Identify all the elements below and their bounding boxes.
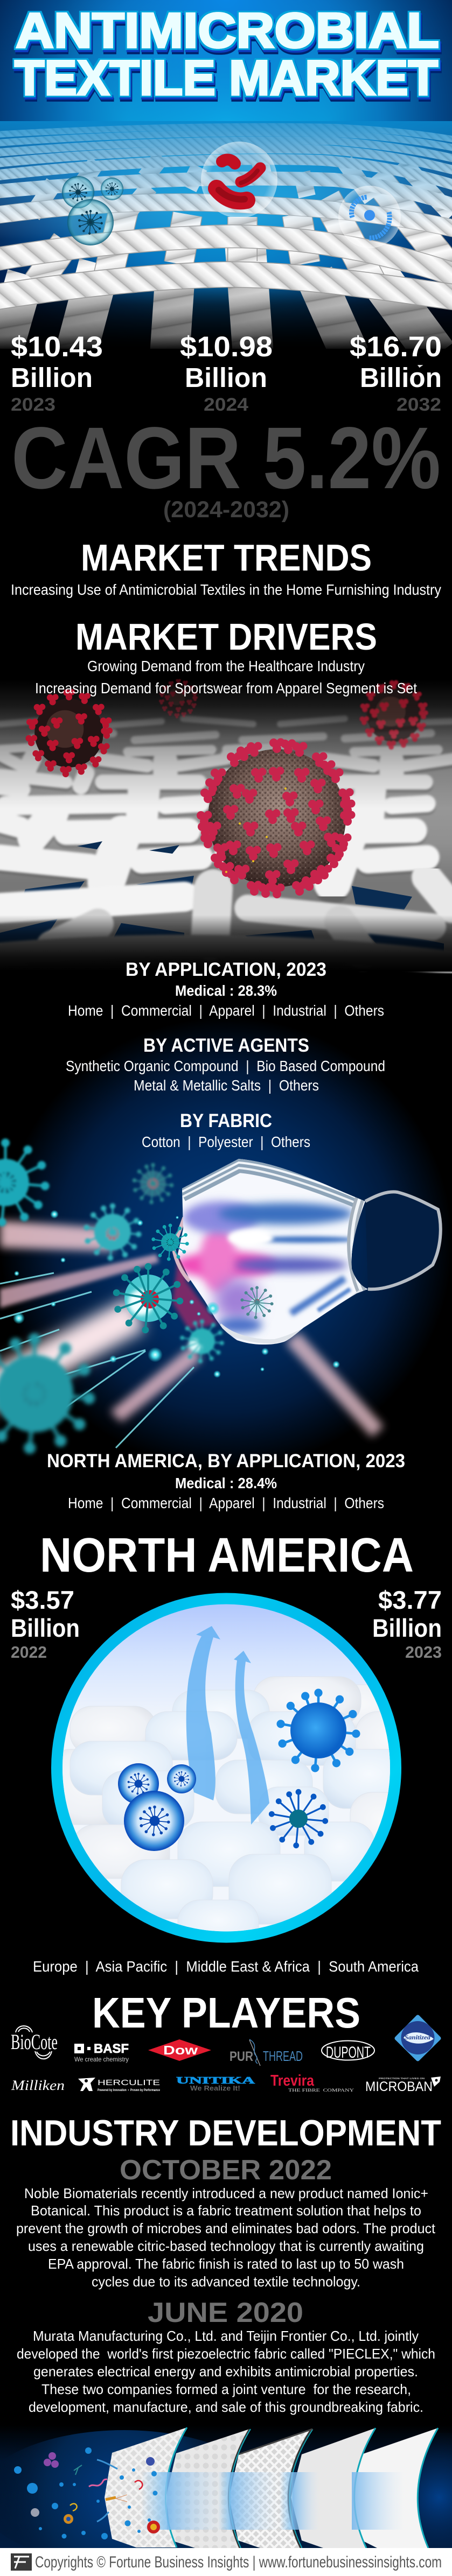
stat: north america 2022: 2022 bbox=[11, 1643, 47, 1662]
logo: unitika bbox=[176, 2075, 255, 2092]
logo: herculite bbox=[78, 2078, 160, 2092]
icon: mask ear loops bbox=[365, 1192, 441, 1289]
icon: rope net bbox=[0, 126, 452, 298]
icon: blue virus bbox=[278, 1690, 359, 1771]
logo: biocote bbox=[11, 2026, 58, 2059]
icon: quilted pillows bbox=[62, 1676, 390, 1931]
logo: trevira: Trevira bbox=[270, 2072, 315, 2089]
icon: motion beams bbox=[0, 1221, 384, 1448]
text: october development: Botanical. This product is a fabric treatment solution that helps to bbox=[31, 2202, 421, 2219]
section: by active agents bbox=[66, 1035, 385, 1094]
stat: 2032 market size: Billion bbox=[360, 362, 442, 393]
text: october development: cycles due to its advanced textile technology. bbox=[92, 2274, 360, 2290]
text: october development: uses a renewable citric-based technology that is currently awaiting bbox=[28, 2238, 424, 2254]
text: june development bbox=[17, 2328, 435, 2415]
stat: 2024 market size: $10.98 bbox=[180, 331, 273, 363]
icon: lower rope strands bbox=[4, 242, 436, 355]
text: june development: Murata Manufacturing Co., Ltd. and Teijin Frontier Co., Ltd. jointly bbox=[33, 2328, 419, 2344]
section: by active agents: BY ACTIVE AGENTS bbox=[143, 1035, 309, 1056]
logo: unitika: UNITIKA bbox=[176, 2075, 255, 2086]
panel: virus on fabric bbox=[0, 679, 452, 972]
logo: unitika: We Realize It! bbox=[190, 2084, 240, 2092]
icon: mask left straps bbox=[173, 1217, 190, 1281]
icon: teal microbe bbox=[270, 1790, 327, 1847]
icon: sharp cyan viruses bbox=[114, 1224, 273, 1363]
section: by application: BY APPLICATION, 2023 bbox=[126, 959, 326, 980]
icon: light band bbox=[141, 2472, 404, 2530]
icon: large virus bbox=[197, 738, 356, 898]
logo: basf bbox=[74, 2042, 129, 2063]
icon: layer one bbox=[105, 2427, 187, 2547]
section: north america by application: Medical : 28.4% bbox=[175, 1475, 277, 1491]
text: driver two: Increasing Demand for Sportswear from Apparel Segment is Set bbox=[35, 680, 417, 696]
text: june development: generates electrical energy and exhibits antimicrobial properties. bbox=[33, 2363, 418, 2380]
text: other regions: Europe | Asia Pacific | Middle East & Africa | South America bbox=[33, 1958, 419, 1975]
section: by active agents: Synthetic Organic Compound | Bio Based Compound bbox=[66, 1058, 385, 1074]
logo: sanitized: Sanitized bbox=[405, 2035, 430, 2041]
text: june development: development, manufacture, and sale of this groundbreaking fabric. bbox=[29, 2399, 423, 2415]
section: by fabric bbox=[142, 1110, 310, 1150]
stat: north america 2023: 2023 bbox=[405, 1643, 442, 1662]
logo: dow bbox=[148, 2039, 211, 2061]
text: october development: EPA approval. The fabric finish is rated to last up to 50 wash bbox=[48, 2256, 404, 2272]
icon: fabric gaps bbox=[0, 841, 444, 954]
stat: 2032 market size bbox=[350, 331, 442, 415]
text: june development: These two companies formed a joint venture for the research, bbox=[41, 2381, 411, 2397]
stat: 2032 market size: $16.70 bbox=[350, 331, 442, 363]
icon: woven fabric bbox=[0, 745, 452, 885]
logo: purthread bbox=[230, 2039, 303, 2066]
heading: june 2020: JUNE 2020 bbox=[148, 2297, 303, 2328]
icon: layer three bbox=[229, 2429, 312, 2548]
stat: north america 2022 bbox=[11, 1586, 80, 1662]
section: north america by application bbox=[47, 1451, 405, 1511]
panel: hero rope background bbox=[0, 0, 452, 365]
panel: mask illustration bbox=[0, 1017, 452, 1469]
stat: 2024 market size: 2024 bbox=[204, 395, 248, 415]
icon: microbes and particles bbox=[14, 2447, 160, 2539]
stat: 2023 market size bbox=[11, 331, 103, 415]
stat: 2023 market size: $10.43 bbox=[11, 331, 103, 363]
stat: north america 2022: Billion bbox=[11, 1614, 80, 1642]
icon: layer edges bbox=[165, 2427, 438, 2548]
panel: filter layers illustration bbox=[0, 2425, 452, 2565]
logo: sanitized bbox=[397, 2017, 439, 2059]
text: october development: prevent the growth of microbes and eliminates bad odors. The product bbox=[16, 2220, 436, 2236]
logo: microban: MICROBAN bbox=[365, 2079, 433, 2094]
stat: north america 2022: $3.57 bbox=[11, 1586, 74, 1614]
logo: herculite: Powered by Innovation • Proven by Performance bbox=[98, 2088, 160, 2092]
icon: rising arrows bbox=[186, 1626, 269, 1825]
stat: 2023 market size: 2023 bbox=[11, 395, 55, 415]
title bbox=[15, 3, 439, 105]
stat: north america 2023: $3.77 bbox=[378, 1586, 442, 1614]
logo: herculite: HERCULITE bbox=[98, 2078, 160, 2087]
text: october development bbox=[16, 2185, 436, 2290]
logo: dow: Dow bbox=[163, 2043, 198, 2057]
logo: biocote: BioCote bbox=[11, 2030, 58, 2054]
stat: 2023 market size: Billion bbox=[11, 362, 93, 393]
icon: faded virus top bbox=[159, 679, 198, 719]
stat: north america 2023 bbox=[372, 1586, 442, 1662]
logo: dupont: DUPONT bbox=[326, 2044, 371, 2061]
icon: company logo bbox=[11, 2553, 32, 2571]
heading: north america: NORTH AMERICA bbox=[40, 1529, 414, 1582]
icon: large blurred virus bbox=[0, 1335, 93, 1452]
icon: blue cells bbox=[118, 1763, 196, 1851]
text: october development: Noble Biomaterials recently introduced a new product named Ionic+ bbox=[24, 2185, 428, 2201]
icon: surgical mask bbox=[178, 1159, 368, 1345]
icon: bubbles with microbes bbox=[62, 142, 401, 248]
heading: october 2022: OCTOBER 2022 bbox=[120, 2155, 332, 2186]
icon: far weave bbox=[0, 719, 452, 740]
stat: 2032 market size: 2032 bbox=[397, 395, 441, 415]
section: by fabric: BY FABRIC bbox=[180, 1110, 272, 1131]
icon: purple glow behind mask bbox=[172, 1238, 218, 1329]
stat: 2024 market size bbox=[180, 331, 273, 415]
heading: market drivers: MARKET DRIVERS bbox=[75, 616, 377, 658]
icon: layer five bbox=[350, 2428, 438, 2548]
section: north america by application: Home | Commercial | Apparel | Industrial | Others bbox=[68, 1495, 384, 1511]
icon: small virus left bbox=[25, 689, 113, 777]
cagr: (2024-2032) bbox=[163, 497, 289, 523]
section: by active agents: Metal & Metallic Salts | Others bbox=[134, 1077, 319, 1094]
logo: basf: We create chemistry bbox=[74, 2056, 129, 2063]
section: by application: Home | Commercial | Apparel | Industrial | Others bbox=[68, 1002, 384, 1019]
logo: purthread: THREAD bbox=[263, 2048, 303, 2064]
stat: 2024 market size: Billion bbox=[185, 362, 267, 393]
section: north america by application: NORTH AMERICA, BY APPLICATION, 2023 bbox=[47, 1451, 405, 1472]
logo: trevira bbox=[270, 2072, 354, 2093]
icon: layer two bbox=[166, 2429, 249, 2548]
section: by fabric: Cotton | Polyester | Others bbox=[142, 1134, 310, 1150]
heading: market trends: MARKET TRENDS bbox=[81, 537, 372, 579]
section: by application: Medical : 28.3% bbox=[175, 982, 277, 999]
text: driver one: Growing Demand from the Healthcare Industry bbox=[87, 658, 365, 674]
footer bar bbox=[0, 2548, 452, 2576]
logo: dupont bbox=[322, 2041, 374, 2061]
icon: blurred cyan viruses bbox=[0, 1140, 173, 1260]
logo: milliken: Milliken bbox=[11, 2078, 65, 2093]
icon: glowing particles bbox=[13, 1210, 340, 1378]
icon: small virus right bbox=[359, 680, 428, 750]
icon: layer four bbox=[291, 2428, 375, 2548]
logo: trevira: THE FIBRE COMPANY bbox=[288, 2087, 354, 2093]
section: by application bbox=[68, 959, 384, 1019]
heading: key players: KEY PLAYERS bbox=[92, 1989, 360, 2037]
stat: north america 2023: Billion bbox=[372, 1614, 442, 1642]
title: ANTIMICROBIAL bbox=[16, 3, 439, 58]
logo: basf: BASF bbox=[94, 2042, 129, 2056]
logo: purthread: PUR bbox=[230, 2049, 253, 2064]
panel: circular fabric illustration bbox=[48, 1593, 431, 1948]
logo: microban: PROTECTION THAT LIVES ON bbox=[379, 2077, 425, 2080]
title: TEXTILE MARKET bbox=[15, 51, 438, 105]
text: june development: developed the world's first piezoelectric fabric called "PIECLEX," which bbox=[17, 2346, 435, 2362]
